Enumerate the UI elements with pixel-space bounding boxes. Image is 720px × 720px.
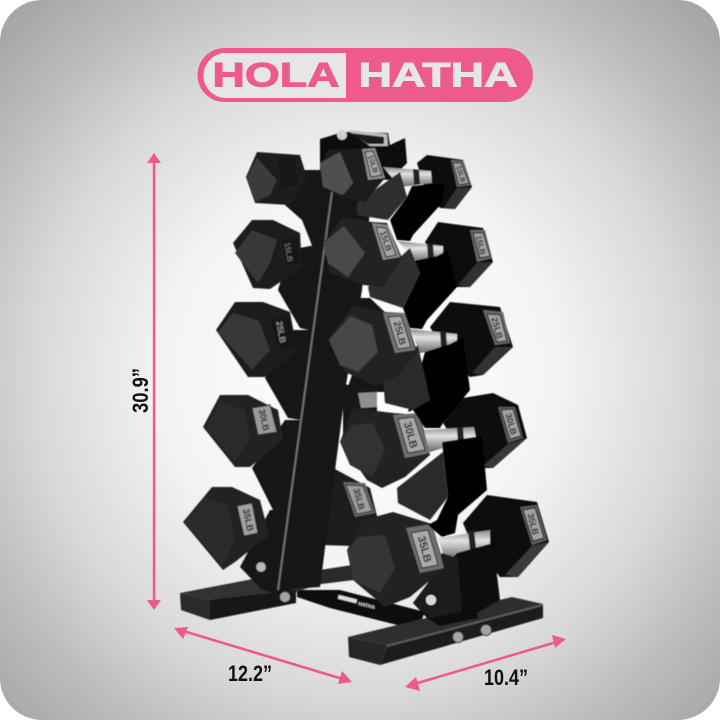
arm plates [390,183,445,241]
left head 25LB [216,302,297,377]
rear dumbbell 35LB: 35LB [351,487,367,511]
left head 30LB [203,395,283,467]
right dumbbell 10LB: 10LB [366,154,380,175]
handle [438,530,490,560]
black arm [413,543,500,626]
left arm plates [240,170,340,597]
rear dumbbell 35LB [322,468,378,546]
logo word HATHA: HATHA [358,56,518,94]
arm plates [408,337,470,428]
right dumbbell 25LB: 25LB [489,316,505,340]
near head [347,512,445,607]
rear frame filler [330,190,388,392]
base bolts [452,624,492,642]
near head [320,148,385,202]
arm plates [428,436,487,537]
right dumbbell 10LB: 10LB [454,165,466,184]
near head [323,217,402,287]
handle [422,427,476,452]
handle [398,241,443,262]
far head [443,393,527,468]
right dumbbell 25LB: 25LB [391,320,408,346]
logo word HOLA: HOLA [212,56,340,94]
far head [463,495,549,577]
near head [340,408,430,488]
dumbbell rack photo [180,130,549,665]
right dumbbell 15LB [323,217,493,329]
right dumbbell 30LB: 30LB [401,421,419,450]
left head 35LB: 35LB [240,508,255,533]
left head 25LB: 25LB [274,320,288,344]
depth arrow [405,635,566,691]
centre junction bolt [280,592,290,602]
far head [430,302,513,377]
left head 10LB [246,152,307,205]
left head 15LB: 15LB [282,242,295,263]
upper rack bracket [320,130,407,180]
front post [277,190,372,590]
far head [425,222,493,287]
front right base bar [348,597,543,665]
logo pill [198,48,533,102]
right dumbbell 30LB: 30LB [503,412,519,436]
small logo on centre bar: HATHA [358,601,376,611]
height label: 30.9” [128,368,153,413]
right dumbbell 35LB [347,495,549,626]
height arrow [147,153,161,610]
left head 35LB [183,487,269,570]
logo left inset [204,53,346,98]
width arrow [174,627,352,684]
small logo on centre bar [338,595,376,611]
rear dumbbell 30LB [343,384,377,445]
width label: 12.2” [228,661,272,686]
near head [328,305,417,386]
left head 30LB: 30LB [257,408,271,432]
right dumbbell 35LB: 35LB [415,535,433,564]
right dumbbell 15LB: 15LB [474,235,487,256]
right dumbbell 35LB: 35LB [525,512,541,536]
arm plates [403,250,457,329]
handle [410,329,457,353]
right dumbbell 25LB [328,302,513,428]
right dumbbell 30LB [340,393,527,537]
depth label: 10.4” [484,665,528,690]
logo [198,48,533,102]
handle [383,167,432,187]
left base bar [180,578,320,620]
rear right base bar [297,565,354,587]
left head 15LB [233,220,302,289]
long centre base bar [297,590,425,630]
right dumbbell 10LB [320,148,472,241]
gusset bolt [256,562,266,572]
right dumbbell 15LB: 15LB [378,230,394,252]
far head [417,155,472,209]
